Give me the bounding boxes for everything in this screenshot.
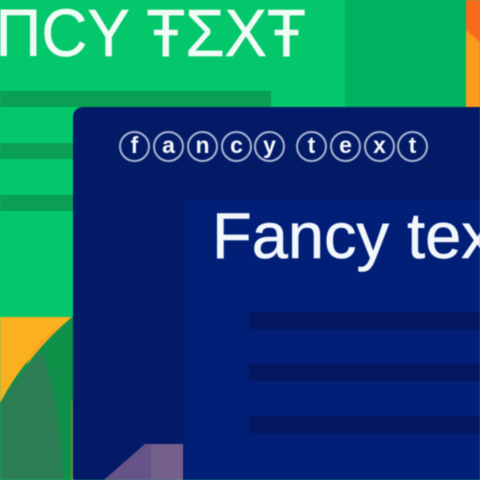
panel: green card bars bbox=[0, 90, 272, 212]
panel: blue inner card bbox=[183, 200, 480, 480]
circled text: n bbox=[195, 132, 210, 158]
circled text: x bbox=[373, 132, 386, 158]
circled text: a bbox=[162, 132, 175, 158]
bar 3 bbox=[249, 416, 480, 433]
bar 1 bbox=[249, 312, 480, 329]
circled text: e bbox=[339, 132, 352, 158]
circled text: c bbox=[230, 132, 243, 158]
bar 2 bbox=[249, 364, 480, 381]
circled text: t bbox=[409, 132, 416, 158]
purple shape bbox=[104, 443, 184, 480]
circled text: t bbox=[308, 132, 315, 158]
panel: navy card bbox=[73, 107, 480, 480]
circled text bbox=[118, 130, 429, 163]
circled text: f bbox=[131, 132, 138, 158]
circled text: y bbox=[263, 132, 276, 158]
